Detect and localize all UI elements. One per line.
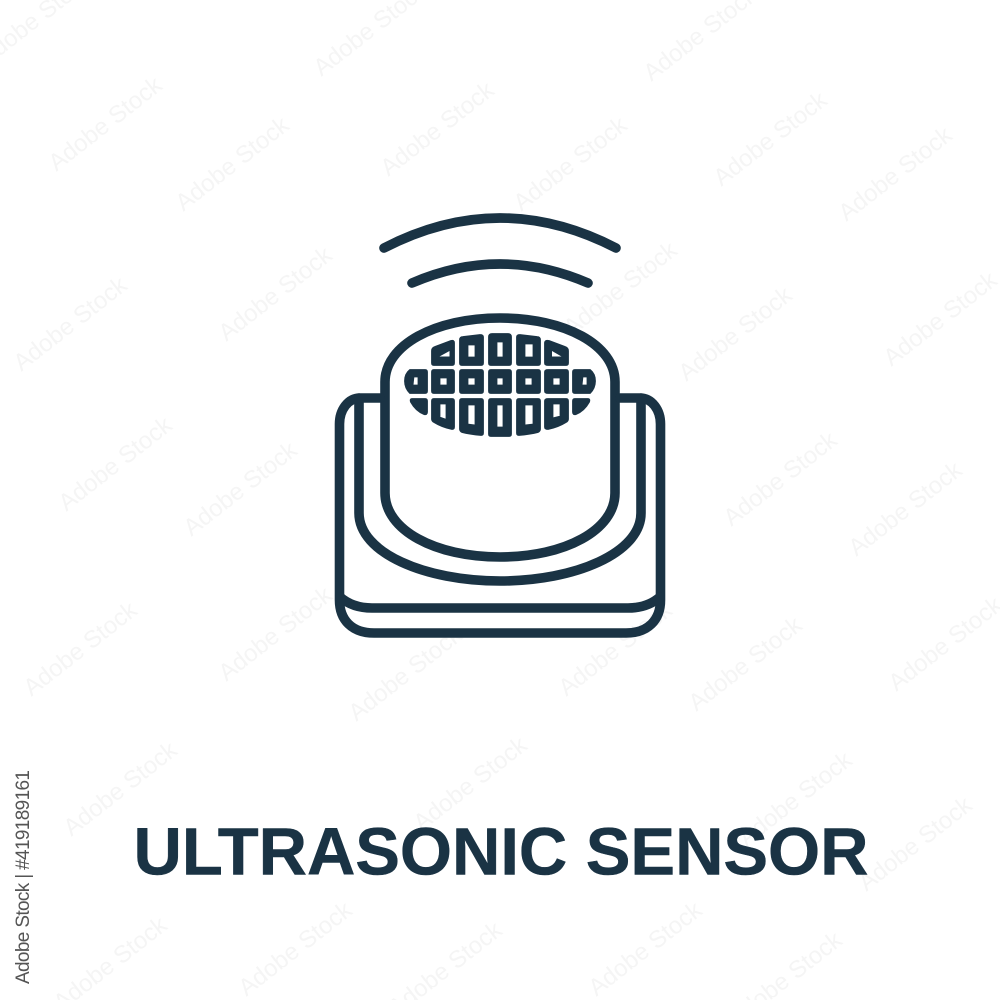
- watermark pattern: Adobe Stock: [583, 896, 708, 1000]
- watermark pattern: Adobe Stock: [343, 621, 468, 727]
- icon: ultrasonic sensor: [340, 218, 660, 633]
- watermark pattern: Adobe Stock: [853, 791, 978, 897]
- icon: inner signal wave: [412, 264, 588, 283]
- speaker grid left triangle hole: [440, 351, 450, 356]
- watermark pattern: Adobe Stock: [170, 111, 295, 217]
- watermark pattern: Adobe Stock: [43, 71, 168, 177]
- watermark pattern: Adobe Stock: [58, 736, 183, 842]
- watermark pattern: Adobe Stock: [408, 731, 533, 837]
- watermark pattern: Adobe Stock: [718, 426, 843, 532]
- sensor head body: [385, 318, 615, 557]
- icon: outer signal wave: [384, 218, 616, 248]
- watermark pattern: Adobe Stock: [233, 896, 358, 1000]
- watermark pattern: Adobe Stock: [553, 596, 678, 702]
- base plate: [340, 398, 660, 633]
- speaker grid: [405, 334, 595, 436]
- watermark id: Adobe Stock | #419189161: [13, 770, 34, 984]
- watermark pattern: Adobe Stock: [178, 436, 303, 542]
- base plate front edge: [340, 597, 660, 608]
- watermark pattern: Adobe Stock: [673, 281, 798, 387]
- watermark pattern: Adobe Stock: [375, 76, 500, 182]
- speaker grid right triangle hole: [552, 351, 562, 356]
- watermark pattern: Adobe Stock: [733, 746, 858, 852]
- watermark pattern: Adobe Stock: [558, 236, 683, 342]
- watermark pattern: Adobe Stock: [833, 121, 958, 227]
- watermark pattern: Adobe Stock: [878, 266, 1000, 372]
- watermark pattern: Adobe Stock: [213, 241, 338, 347]
- watermark pattern: Adobe Stock: [843, 456, 968, 562]
- watermark pattern: Adobe Stock: [708, 86, 833, 192]
- watermark pattern: Adobe Stock: [508, 111, 633, 217]
- watermark pattern: Adobe Stock: [18, 596, 143, 702]
- title: ULTRASONIC SENSOR: [134, 814, 868, 890]
- watermark pattern: Adobe Stock: [213, 581, 338, 687]
- watermark pattern: Adobe Stock: [53, 411, 178, 517]
- inner base cradle: [359, 398, 641, 581]
- watermark pattern: Adobe Stock: [683, 611, 808, 717]
- watermark pattern: Adobe Stock: [8, 271, 133, 377]
